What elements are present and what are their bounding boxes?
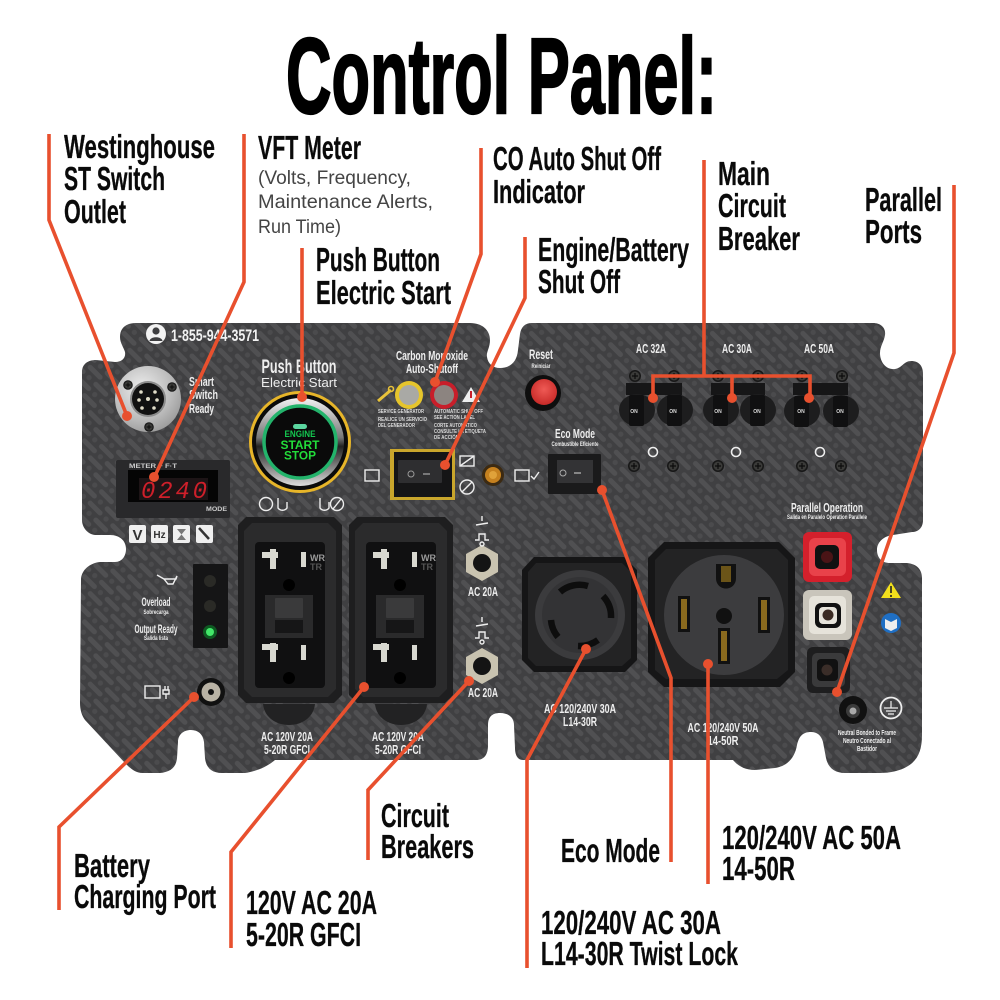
callout: VFT Meter: VFT Meter (258, 129, 361, 166)
callout: 120/240V AC 50A 14-50R (722, 819, 901, 887)
callout: 120/240V AC 30A L14-30R Twist Lock (541, 904, 738, 972)
status LED with battery icon (482, 464, 539, 486)
smart switch label: Switch (189, 387, 218, 402)
meter mode icons (129, 525, 213, 544)
callout: Parallel Ports: Parallel (865, 181, 942, 218)
main circuit breakers: ON (714, 409, 722, 415)
CO small print: DEL GENERADOR (378, 423, 415, 429)
callout: Battery Charging Port: Charging Port (74, 878, 216, 915)
reset button: Reset (529, 346, 553, 362)
smart switch label (189, 374, 218, 416)
callout: Circuit Breakers (381, 797, 474, 865)
main circuit breakers: ON (669, 409, 677, 415)
leader: parallel ports (832, 185, 954, 697)
callout: Eco Mode: Eco Mode (561, 832, 660, 869)
CO small print: REALICE UN SERVICIO (378, 417, 427, 423)
callout: Push Button Electric Start: Electric Start (316, 274, 451, 311)
callout: Parallel Ports (865, 181, 942, 250)
warning and manual icons (881, 582, 901, 633)
start stop button: STOP (284, 450, 316, 462)
battery and engine icons (365, 456, 474, 494)
VFT meter: MODE (206, 507, 227, 513)
callout: 120V AC 20A 5-20R GFCI (246, 884, 377, 953)
callout: Engine/Battery Shut Off: Engine/Battery (538, 231, 689, 268)
callout: Main Circuit Breaker: Circuit (718, 187, 786, 224)
panel: control board (80, 323, 923, 773)
20A push breakers: AC 20A (468, 584, 498, 599)
CO indicator lights (378, 381, 480, 409)
leader: Westinghouse ST switch outlet (49, 134, 132, 421)
callout: Parallel Ports: Ports (865, 213, 922, 250)
push button heading: Electric Start (261, 375, 337, 390)
callout: Circuit Breakers: Circuit (381, 797, 449, 834)
engine battery rocker switch (390, 449, 455, 500)
parallel operation ports (787, 500, 867, 693)
neutral bond terminal and ground symbol: Neutral Bonded to Frame (838, 728, 896, 737)
GFCI labels: AC 120V 20A (372, 729, 424, 744)
leader: engine battery shut off (440, 237, 525, 470)
status lights panel (193, 564, 228, 648)
callout: Battery Charging Port (74, 847, 216, 915)
30A outlet label: L14-30R (563, 714, 597, 729)
leader: 50A outlet (703, 659, 713, 884)
carbon monoxide heading: Carbon Monoxide (396, 348, 468, 363)
meter mode icons: V (132, 527, 143, 544)
phone number (146, 324, 259, 345)
callout: CO Auto Shut Off Indicator: CO Auto Shut Off (493, 140, 662, 177)
callout: 120/240V AC 30A L14-30R Twist Lock: L14-30R Twist Lock (541, 935, 738, 972)
leader: eco mode (597, 485, 671, 862)
main circuit breakers: ON (797, 409, 805, 415)
CO small print: AUTOMATIC SHUT OFF (434, 409, 483, 415)
main circuit breakers (619, 341, 859, 472)
callout: Push Button Electric Start: Push Button (316, 241, 440, 278)
CO small print: SERVICE GENERATOR (378, 409, 424, 415)
GFCI labels: 5-20R GFCI (375, 742, 421, 757)
GFCI labels: AC 120V 20A (261, 729, 313, 744)
engine start stop icons (260, 498, 344, 510)
callout: VFT Meter: Run Time) (258, 216, 341, 238)
status light labels: Overload (142, 595, 170, 609)
parallel operation ports: Parallel Operation (791, 500, 863, 515)
VFT meter (116, 460, 230, 518)
callout: VFT Meter: (Volts, Frequency, (258, 167, 411, 189)
callout: Engine/Battery Shut Off (538, 231, 689, 300)
callout: Push Button Electric Start (316, 241, 451, 311)
meter mode icons: Hz (153, 530, 166, 541)
leader: 20A GFCI (231, 682, 369, 948)
phone number: 1-855-944-3571 (171, 326, 259, 345)
leader: push button (297, 248, 307, 402)
smart switch label: Ready (189, 401, 214, 416)
callout: VFT Meter: Maintenance Alerts, (258, 191, 433, 213)
smart switch label: Smart (189, 374, 214, 389)
eco mode switch (548, 426, 601, 494)
leader: CO indicator (430, 148, 481, 387)
parallel operation ports: Salida en Paralelo Operation Parallele (787, 515, 867, 521)
status light labels (134, 575, 178, 642)
eco mode switch: Combustible Eficiente (552, 442, 599, 448)
VFT meter: METER + F·T (129, 464, 177, 470)
callout: Battery Charging Port: Battery (74, 847, 150, 884)
30A outlet label: AC 120/240V 30A (544, 701, 616, 716)
status light labels: Sobrecarga (144, 610, 169, 616)
leader lines (49, 134, 954, 968)
20A push breakers (466, 516, 498, 700)
callout: Engine/Battery Shut Off: Shut Off (538, 263, 621, 300)
callout: Westinghouse ST Switch Outlet (64, 128, 215, 230)
callout: 120V AC 20A 5-20R GFCI: 5-20R GFCI (246, 916, 361, 953)
start stop button: ENGINE (284, 429, 316, 439)
leader: battery charging port (59, 692, 199, 910)
30A outlet label (544, 701, 616, 729)
50A outlet label (688, 720, 759, 748)
50A outlet 14-50R (648, 542, 795, 687)
callout: 120/240V AC 50A 14-50R: 120/240V AC 50A (722, 819, 901, 856)
start stop button: START (280, 440, 320, 452)
callout: CO Auto Shut Off Indicator (493, 140, 662, 210)
callout: Main Circuit Breaker: Breaker (718, 220, 800, 257)
reset button: Reiniciar (532, 364, 551, 370)
leader: 30A outlet (527, 644, 591, 968)
GFCI labels: 5-20R GFCI (264, 742, 310, 757)
callout: CO Auto Shut Off Indicator: Indicator (493, 173, 585, 210)
neutral bond terminal and ground symbol (838, 696, 902, 753)
neutral bond terminal and ground symbol: Bastidor (857, 744, 877, 753)
VFT meter: 0240 (141, 479, 207, 506)
start stop button (249, 391, 351, 493)
GFCI outlet 1 (238, 517, 342, 725)
callout: Westinghouse ST Switch Outlet: ST Switch (64, 160, 165, 197)
20A push breakers: AC 20A (468, 685, 498, 700)
CO small print: DE ACCIÓN (434, 433, 459, 441)
callout: Westinghouse ST Switch Outlet: Outlet (64, 193, 126, 230)
callout: Main Circuit Breaker: Main (718, 155, 770, 192)
50A outlet label: 14-50R (708, 733, 739, 748)
CO small print: CORTE AUTOMATICO (434, 423, 477, 429)
reset button (525, 346, 561, 411)
callout: 120V AC 20A 5-20R GFCI: 120V AC 20A (246, 884, 377, 921)
carbon monoxide heading: Auto-Shutoff (406, 361, 458, 376)
main circuit breakers: ON (836, 409, 844, 415)
main circuit breakers: AC 50A (804, 341, 834, 356)
main circuit breakers: ON (630, 409, 638, 415)
leader: circuit breakers (368, 676, 474, 860)
CO small print (378, 409, 486, 441)
callout: 120/240V AC 30A L14-30R Twist Lock: 120/240V AC 30A (541, 904, 721, 941)
30A twist lock outlet L14-30R (522, 557, 637, 672)
push button heading: Push Button (262, 357, 336, 378)
smart switch connector (115, 366, 181, 432)
GFCI outlet 2 (349, 517, 453, 725)
carbon monoxide heading (396, 348, 468, 376)
main circuit breakers: ON (753, 409, 761, 415)
status light labels: Output Ready (134, 622, 178, 636)
50A outlet label: AC 120/240V 50A (688, 720, 759, 735)
CO small print: SEE ACTION LABEL (434, 415, 475, 421)
GFCI labels (261, 729, 424, 757)
battery charging port (145, 678, 225, 706)
callout: VFT Meter (258, 129, 433, 238)
push button heading (261, 357, 337, 390)
leader: VFT meter (149, 134, 244, 482)
main circuit breakers: AC 32A (636, 341, 666, 356)
main circuit breakers: AC 30A (722, 341, 752, 356)
CO small print: CONSULTE LA ETIQUETA (434, 429, 486, 435)
callout: Main Circuit Breaker (718, 155, 800, 257)
callout: Circuit Breakers: Breakers (381, 828, 474, 865)
status light labels: Salida lista (144, 636, 168, 642)
callout: Westinghouse ST Switch Outlet: Westinghouse (64, 128, 215, 165)
neutral bond terminal and ground symbol: Neutro Conectado al (843, 736, 891, 745)
eco mode switch: Eco Mode (555, 426, 595, 441)
leader: main circuit breaker (648, 160, 814, 403)
callout: 120/240V AC 50A 14-50R: 14-50R (722, 850, 795, 887)
